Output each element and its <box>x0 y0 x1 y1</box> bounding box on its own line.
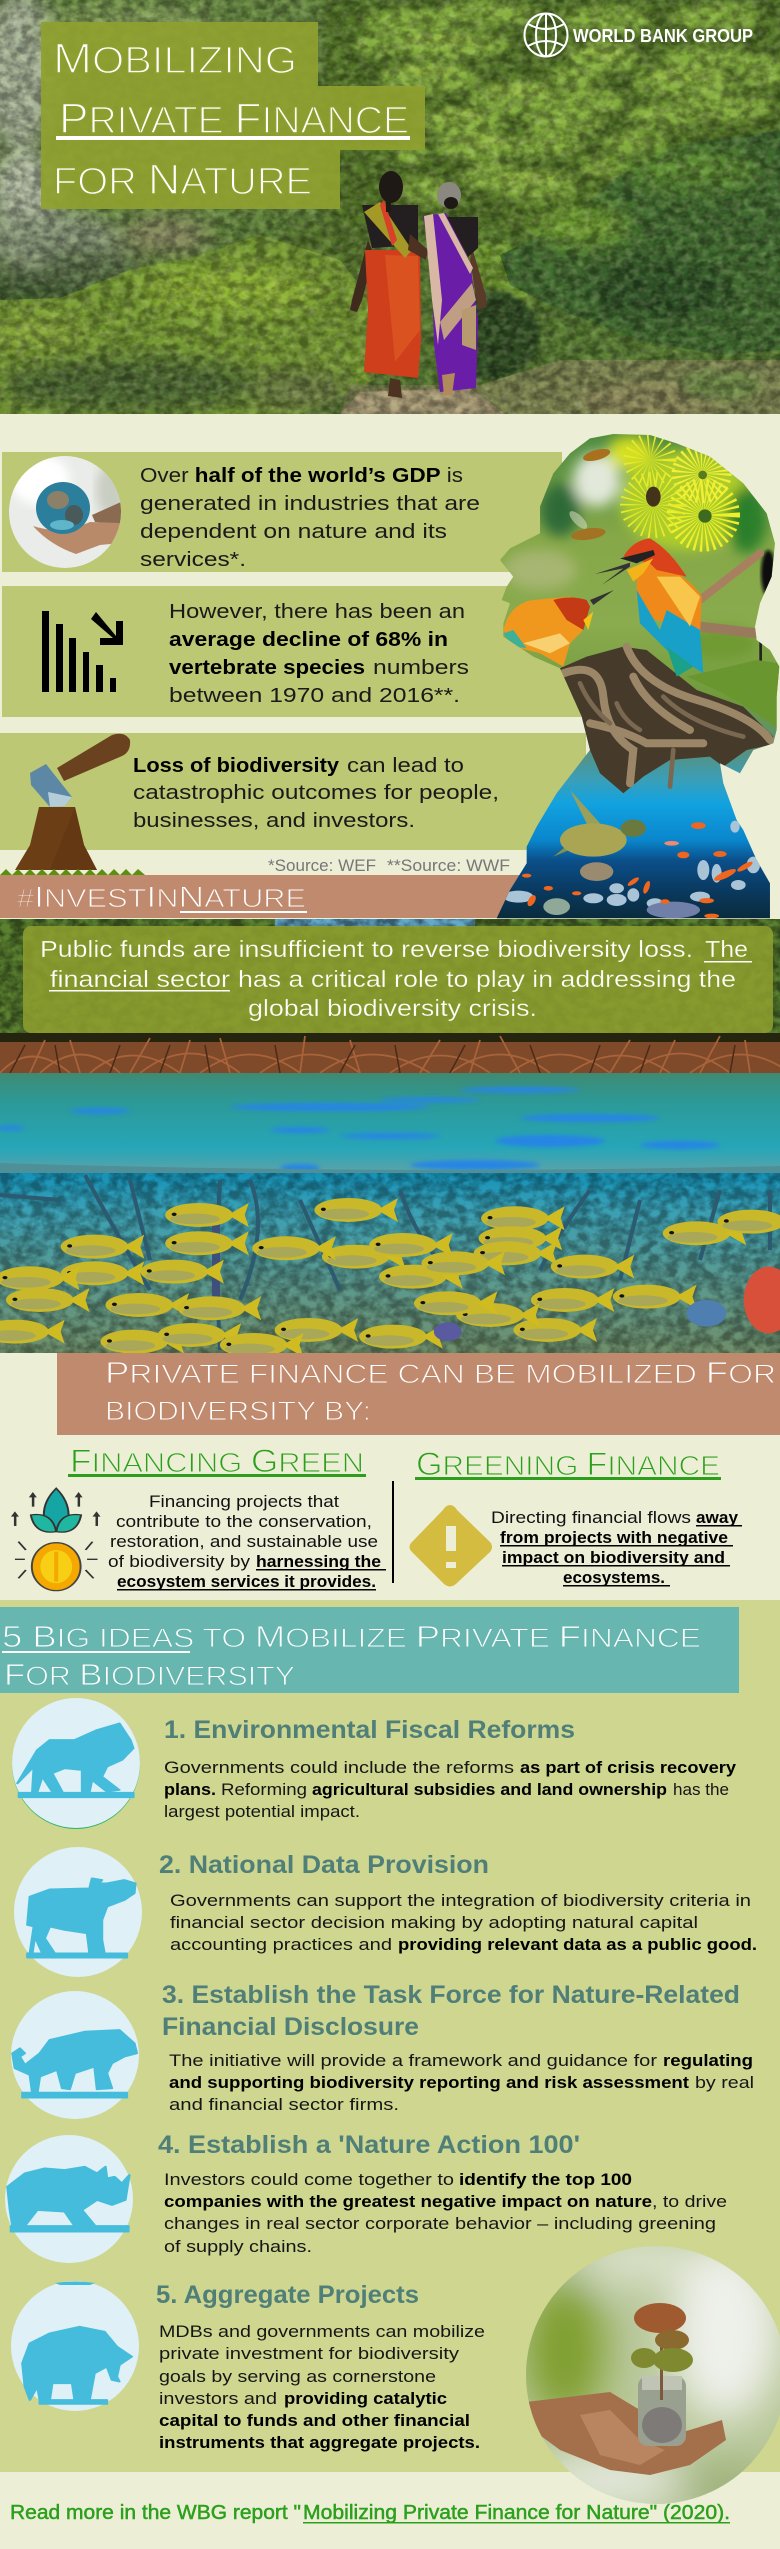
heading: 5 big ideas: FOR BIODIVERSITY <box>4 1657 295 1692</box>
text: GDP: Over half of the world’s GDP is <box>140 464 463 487</box>
turtle <box>553 790 646 857</box>
icon: plant growing from coin <box>11 1488 100 1591</box>
text: loss: businesses, and investors. <box>133 809 415 832</box>
text: idea 2 <box>170 1891 757 1954</box>
text: idea 5: goals by serving as cornerstone <box>159 2367 436 2386</box>
blurred upper background <box>503 437 767 660</box>
text: greening finance <box>491 1509 742 1587</box>
text: loss: can lead to <box>347 754 464 777</box>
logo: World Bank Group <box>524 14 753 56</box>
source note <box>268 857 510 875</box>
text: idea 5: private investment for biodiversity <box>159 2344 460 2363</box>
jar of coins <box>638 2376 686 2446</box>
text: financing green <box>108 1493 386 1591</box>
dark hair edge <box>761 550 776 597</box>
icon: rhino <box>5 2135 133 2263</box>
birds <box>503 538 703 677</box>
callout: public funds: financial sector <box>50 966 230 992</box>
text: decline: However, there has been an <box>169 600 465 623</box>
text: idea 2: providing relevant data as a public good. <box>398 1935 757 1954</box>
foreground right bush <box>500 130 780 355</box>
source note: *Source: WEF <box>268 857 376 875</box>
text: financing green: Financing projects that <box>149 1493 339 1511</box>
text: greening finance: Directing financial flows <box>491 1509 691 1527</box>
heading: private finance can be mobilized: PRIVATE FINANCE CAN BE MOBILIZED FOR <box>105 1355 776 1390</box>
text: decline: numbers <box>373 656 469 679</box>
panel: footer background <box>0 2472 780 2549</box>
hands <box>526 2392 726 2475</box>
text: financing green: harnessing the <box>256 1553 381 1571</box>
text: financing green: restoration, and sustainable use <box>110 1533 378 1551</box>
hero photo: women walking through tea plantation <box>0 0 780 418</box>
title block: FOR NATURE <box>53 156 312 204</box>
fish school <box>0 1198 780 1357</box>
text: idea 1: plans. <box>164 1780 216 1799</box>
text: GDP <box>140 464 480 571</box>
hashtag banner <box>0 875 530 918</box>
text: idea 3 <box>169 2051 754 2114</box>
text: loss: Loss of biodiversity <box>133 754 340 777</box>
idea 5: aggregate projects <box>11 2281 485 2452</box>
tree <box>631 2303 693 2400</box>
panel: species decline <box>2 586 592 717</box>
text: idea 5: MDBs and governments can mobilize <box>159 2322 485 2341</box>
footer: read more: Mobilizing Private Finance for Nature" (2020). <box>303 2501 730 2524</box>
icon: two women in saris <box>350 171 486 398</box>
idea 2: national data provision <box>14 1847 757 1977</box>
text: loss: catastrophic outcomes for people, <box>133 781 499 804</box>
icon: big cat <box>11 1991 139 2119</box>
text: GDP: dependent on nature and its <box>140 520 447 543</box>
callout: public funds: Public funds are insufficient to reverse biodiversity loss. <box>40 936 693 962</box>
title block <box>41 22 425 209</box>
title block: PRIVATE FINANCE <box>59 95 409 143</box>
text: loss <box>133 754 499 832</box>
ground and path <box>340 360 780 418</box>
text: idea 2: Governments can support the integration of biodiversity criteria in <box>170 1891 751 1910</box>
panel: greening finance <box>410 1446 742 1587</box>
heading: idea 3 <box>162 1981 740 2041</box>
title block: MOBILIZING <box>53 35 297 83</box>
heading: financing green: FINANCING GREEN <box>70 1443 364 1479</box>
text: idea 4: , to drive <box>652 2192 727 2211</box>
foliage texture <box>0 0 780 414</box>
text: idea 2: financial sector decision making by adopting natural capital <box>170 1913 698 1932</box>
idea 1: environmental fiscal reforms: 1. Environmental Fiscal Reforms <box>164 1716 575 1744</box>
mangrove and reef photo <box>0 919 780 1357</box>
callout: public funds: global biodiversity crisis. <box>248 995 537 1021</box>
flowers <box>637 447 722 533</box>
hashtag banner: #INVEST INNATURE <box>17 881 306 914</box>
text: idea 1: largest potential impact. <box>164 1802 360 1821</box>
underwater reef <box>0 1173 780 1357</box>
text: idea 4: of supply chains. <box>164 2237 312 2256</box>
text: idea 1: agricultural subsidies and land ownership <box>312 1780 667 1799</box>
text: idea 3: and supporting biodiversity reporting and risk assessment <box>169 2073 689 2092</box>
footer: read more: Read more in the WBG report " <box>10 2501 301 2524</box>
roots <box>560 647 773 793</box>
panel: 5 big ideas background <box>0 1600 780 2472</box>
text: idea 5: instruments that aggregate projects. <box>159 2433 480 2452</box>
heading: 5 big ideas: 5 B IG IDEAS TO MOBILIZE PRIVATE FINANCE <box>2 1619 701 1654</box>
idea 3: task force for nature-related financial disclosure <box>11 1981 754 2119</box>
icon: elephant <box>11 2281 139 2411</box>
text: greening finance: ecosystems. <box>563 1569 665 1587</box>
text: decline: average decline of 68% in <box>169 628 448 651</box>
icon: declining bars with arrow <box>42 611 123 692</box>
divider <box>392 1481 394 1583</box>
heading: greening finance: GREENING FINANCE <box>416 1446 720 1482</box>
text: idea 1: has the <box>673 1780 729 1799</box>
text: idea 5: capital to funds and other financial <box>159 2411 470 2430</box>
callout: public funds: The <box>705 936 748 962</box>
heading: 5 big ideas <box>0 1607 739 1693</box>
photo: hands holding jar of coins with tree <box>525 2238 780 2516</box>
background tea rows <box>323 0 780 233</box>
text: GDP: services*. <box>140 548 246 571</box>
text: idea 1: Reforming <box>221 1780 307 1799</box>
foreground left bush <box>0 235 375 414</box>
text: idea 4: companies with the greatest negative impact on nature <box>164 2192 652 2211</box>
mid ground foliage behind women <box>280 220 540 380</box>
text: idea 1: as part of crisis recovery <box>520 1758 737 1777</box>
icon: warning diamond <box>410 1505 492 1586</box>
text: idea 5: providing catalytic <box>284 2389 447 2408</box>
idea 1: environmental fiscal reforms <box>12 1698 737 1829</box>
idea 4: nature action 100 <box>5 2131 727 2263</box>
text: idea 5 <box>159 2322 485 2452</box>
logo: World Bank Group: WORLD BANK GROUP <box>573 25 753 46</box>
branches <box>700 549 764 661</box>
text: idea 3: regulating <box>663 2051 753 2070</box>
text: idea 5: investors and <box>159 2389 277 2408</box>
heading: private finance can be mobilized: BIODIVERSITY BY: <box>105 1396 371 1426</box>
text: idea 4: Investors could come together to <box>164 2170 454 2189</box>
source note: **Source: WWF <box>387 857 510 875</box>
text: greening finance: from projects with negative <box>500 1529 728 1547</box>
text: idea 4: identify the top 100 <box>459 2170 632 2189</box>
panel: loss of biodiversity <box>0 733 586 850</box>
text: decline: between 1970 and 2016**. <box>169 684 460 707</box>
callout: public funds: has a critical role to play in addressing the <box>238 966 736 992</box>
panel: financing green <box>11 1443 386 1591</box>
heading: private finance can be mobilized <box>57 1353 780 1435</box>
icon: lion <box>12 1698 140 1829</box>
grass <box>687 660 779 730</box>
text: financing green: ecosystem services it provides. <box>117 1573 376 1591</box>
text: idea 2: accounting practices and <box>170 1935 392 1954</box>
text: GDP: generated in industries that are <box>140 492 480 515</box>
silhouette collage: woman's profile filled with nature <box>490 430 780 920</box>
text: financing green: of biodiversity by <box>108 1553 251 1571</box>
heading: idea 3: 3. Establish the Task Force for Nature-Related <box>162 1981 740 2009</box>
text: idea 3: The initiative will provide a framework and guidance for <box>169 2051 657 2070</box>
coral stones <box>503 821 760 918</box>
bees <box>567 447 661 542</box>
orange fish <box>522 822 754 918</box>
footer: read more <box>10 2501 730 2524</box>
text: idea 3: and financial sector firms. <box>169 2095 399 2114</box>
left hillside <box>0 0 390 310</box>
water surface <box>0 1073 780 1173</box>
icon: hands holding globe <box>9 455 128 568</box>
idea 5: aggregate projects: 5. Aggregate Projects <box>156 2281 419 2309</box>
panel: GDP dependence <box>2 452 562 572</box>
icon: buffalo <box>14 1847 142 1977</box>
idea 4: nature action 100: 4. Establish a 'Nature Action 100' <box>158 2131 580 2159</box>
text: greening finance: away <box>696 1509 739 1527</box>
mangrove roots <box>0 1033 780 1074</box>
text: idea 4: changes in real sector corporate behavior – including greening <box>164 2214 716 2233</box>
text: financing green: contribute to the conservation, <box>116 1513 372 1531</box>
text: idea 4 <box>164 2170 727 2256</box>
text: idea 1: Governments could include the reforms <box>164 1758 514 1777</box>
red coral <box>744 1267 780 1333</box>
text: decline: vertebrate species <box>169 656 365 679</box>
text: decline <box>169 600 469 707</box>
text: greening finance: impact on biodiversity and <box>502 1549 725 1567</box>
icon: axe in tree stump <box>0 734 145 875</box>
text: idea 1 <box>164 1758 737 1821</box>
idea 2: national data provision: 2. National Data Provision <box>159 1851 489 1879</box>
text: idea 3: by real <box>695 2073 754 2092</box>
callout: public funds <box>23 926 773 1033</box>
heading: idea 3: Financial Disclosure <box>162 2013 419 2041</box>
